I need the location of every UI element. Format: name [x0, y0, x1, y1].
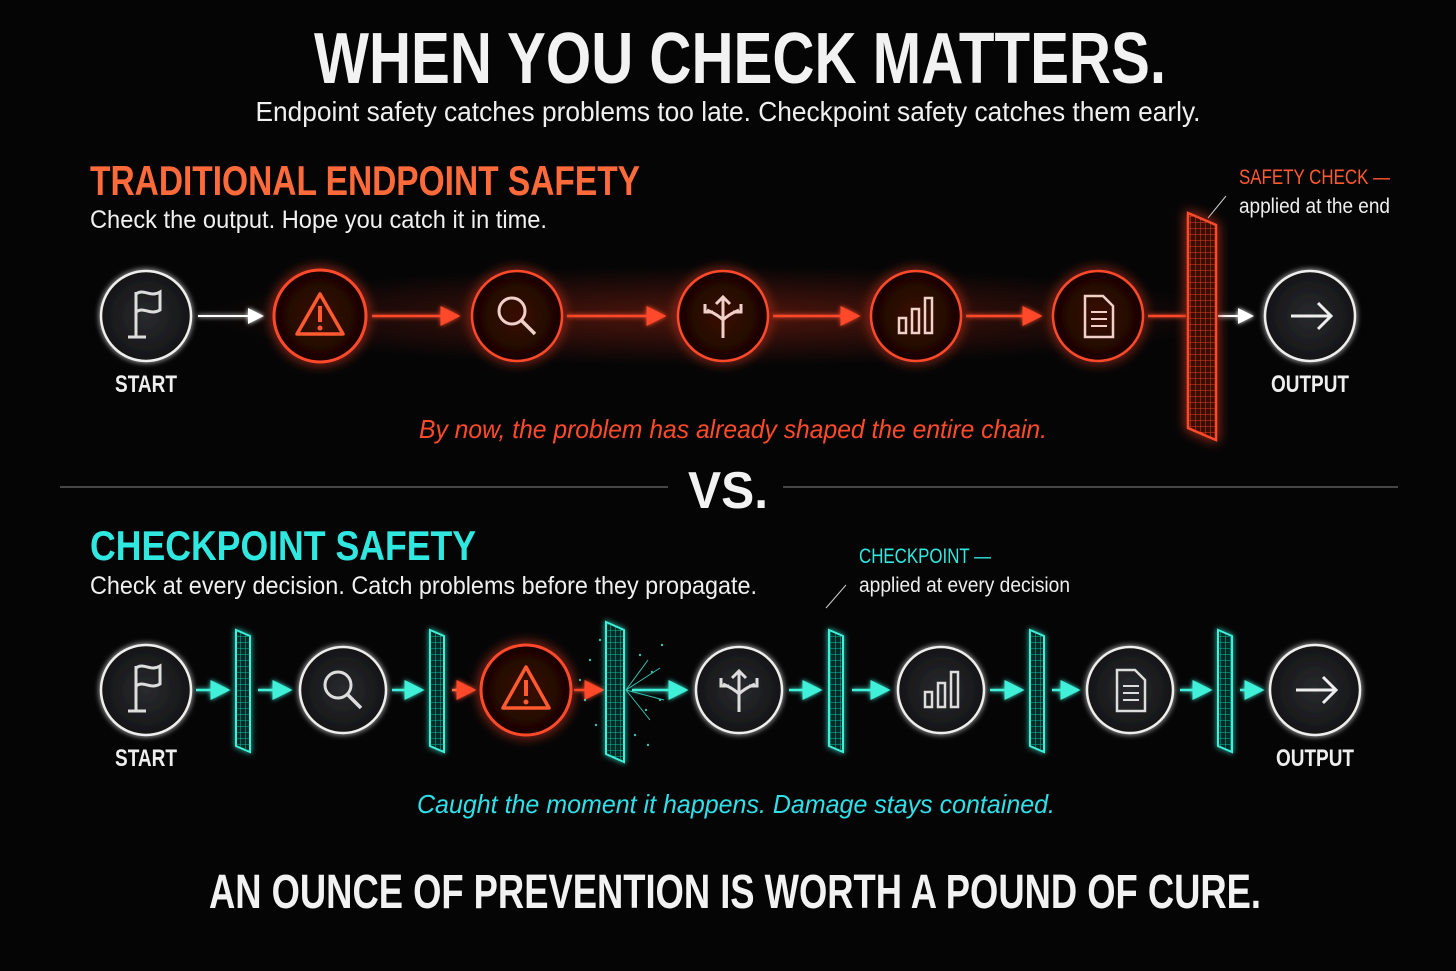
- callout: safety check: applied at the end: [1239, 195, 1390, 218]
- node: start (checkpoint): START: [115, 745, 177, 772]
- heading: traditional endpoint safety: TRADITIONAL ENDPOINT SAFETY: [90, 157, 640, 204]
- node: document (red): [1053, 271, 1143, 361]
- caption: endpoint: By now, the problem has already shaped the entire chain.: [419, 414, 1047, 444]
- callout: checkpoint: [826, 545, 1070, 608]
- node: output: OUTPUT: [1271, 371, 1349, 398]
- subtext: checkpoint: Check at every decision. Catch problems before they propagate.: [90, 572, 757, 600]
- node: output (checkpoint): [1270, 645, 1360, 772]
- node: document: [1087, 647, 1173, 733]
- red glow band: [200, 266, 1240, 366]
- title: WHEN YOU CHECK MATTERS.: [314, 19, 1166, 99]
- gate: end safety check: [1188, 213, 1216, 440]
- callout: checkpoint: applied at every decision: [859, 574, 1070, 597]
- callout: safety check: [1208, 166, 1390, 218]
- node: output: [1265, 271, 1355, 398]
- divider: vs: VS.: [688, 462, 768, 520]
- subtitle: Endpoint safety catches problems too late. Checkpoint safety catches them early.: [256, 96, 1200, 127]
- node: search: [300, 647, 386, 733]
- caption: checkpoint: Caught the moment it happens. Damage stays contained.: [417, 789, 1055, 819]
- node: branch: [696, 647, 782, 733]
- node: chart (red): [871, 271, 961, 361]
- node: start (checkpoint): [101, 645, 191, 772]
- heading: checkpoint safety: CHECKPOINT SAFETY: [90, 522, 476, 569]
- flow: traditional: [198, 315, 1252, 317]
- node: start: [101, 271, 191, 398]
- node: start: START: [115, 371, 177, 398]
- callout: checkpoint: CHECKPOINT —: [859, 545, 991, 568]
- node: warning (red): [274, 270, 366, 362]
- sparks at caught checkpoint: [579, 639, 664, 746]
- node: branch (red): [678, 271, 768, 361]
- flow: checkpoint arrows: [196, 689, 1262, 691]
- subtext: endpoint: Check the output. Hope you catch it in time.: [90, 206, 547, 234]
- callout: safety check: SAFETY CHECK —: [1239, 166, 1390, 189]
- node: warning (red): [481, 645, 571, 735]
- node: output (checkpoint): OUTPUT: [1276, 745, 1354, 772]
- gates: checkpoints: [236, 622, 1232, 762]
- node: search (red): [472, 271, 562, 361]
- node: chart: [898, 647, 984, 733]
